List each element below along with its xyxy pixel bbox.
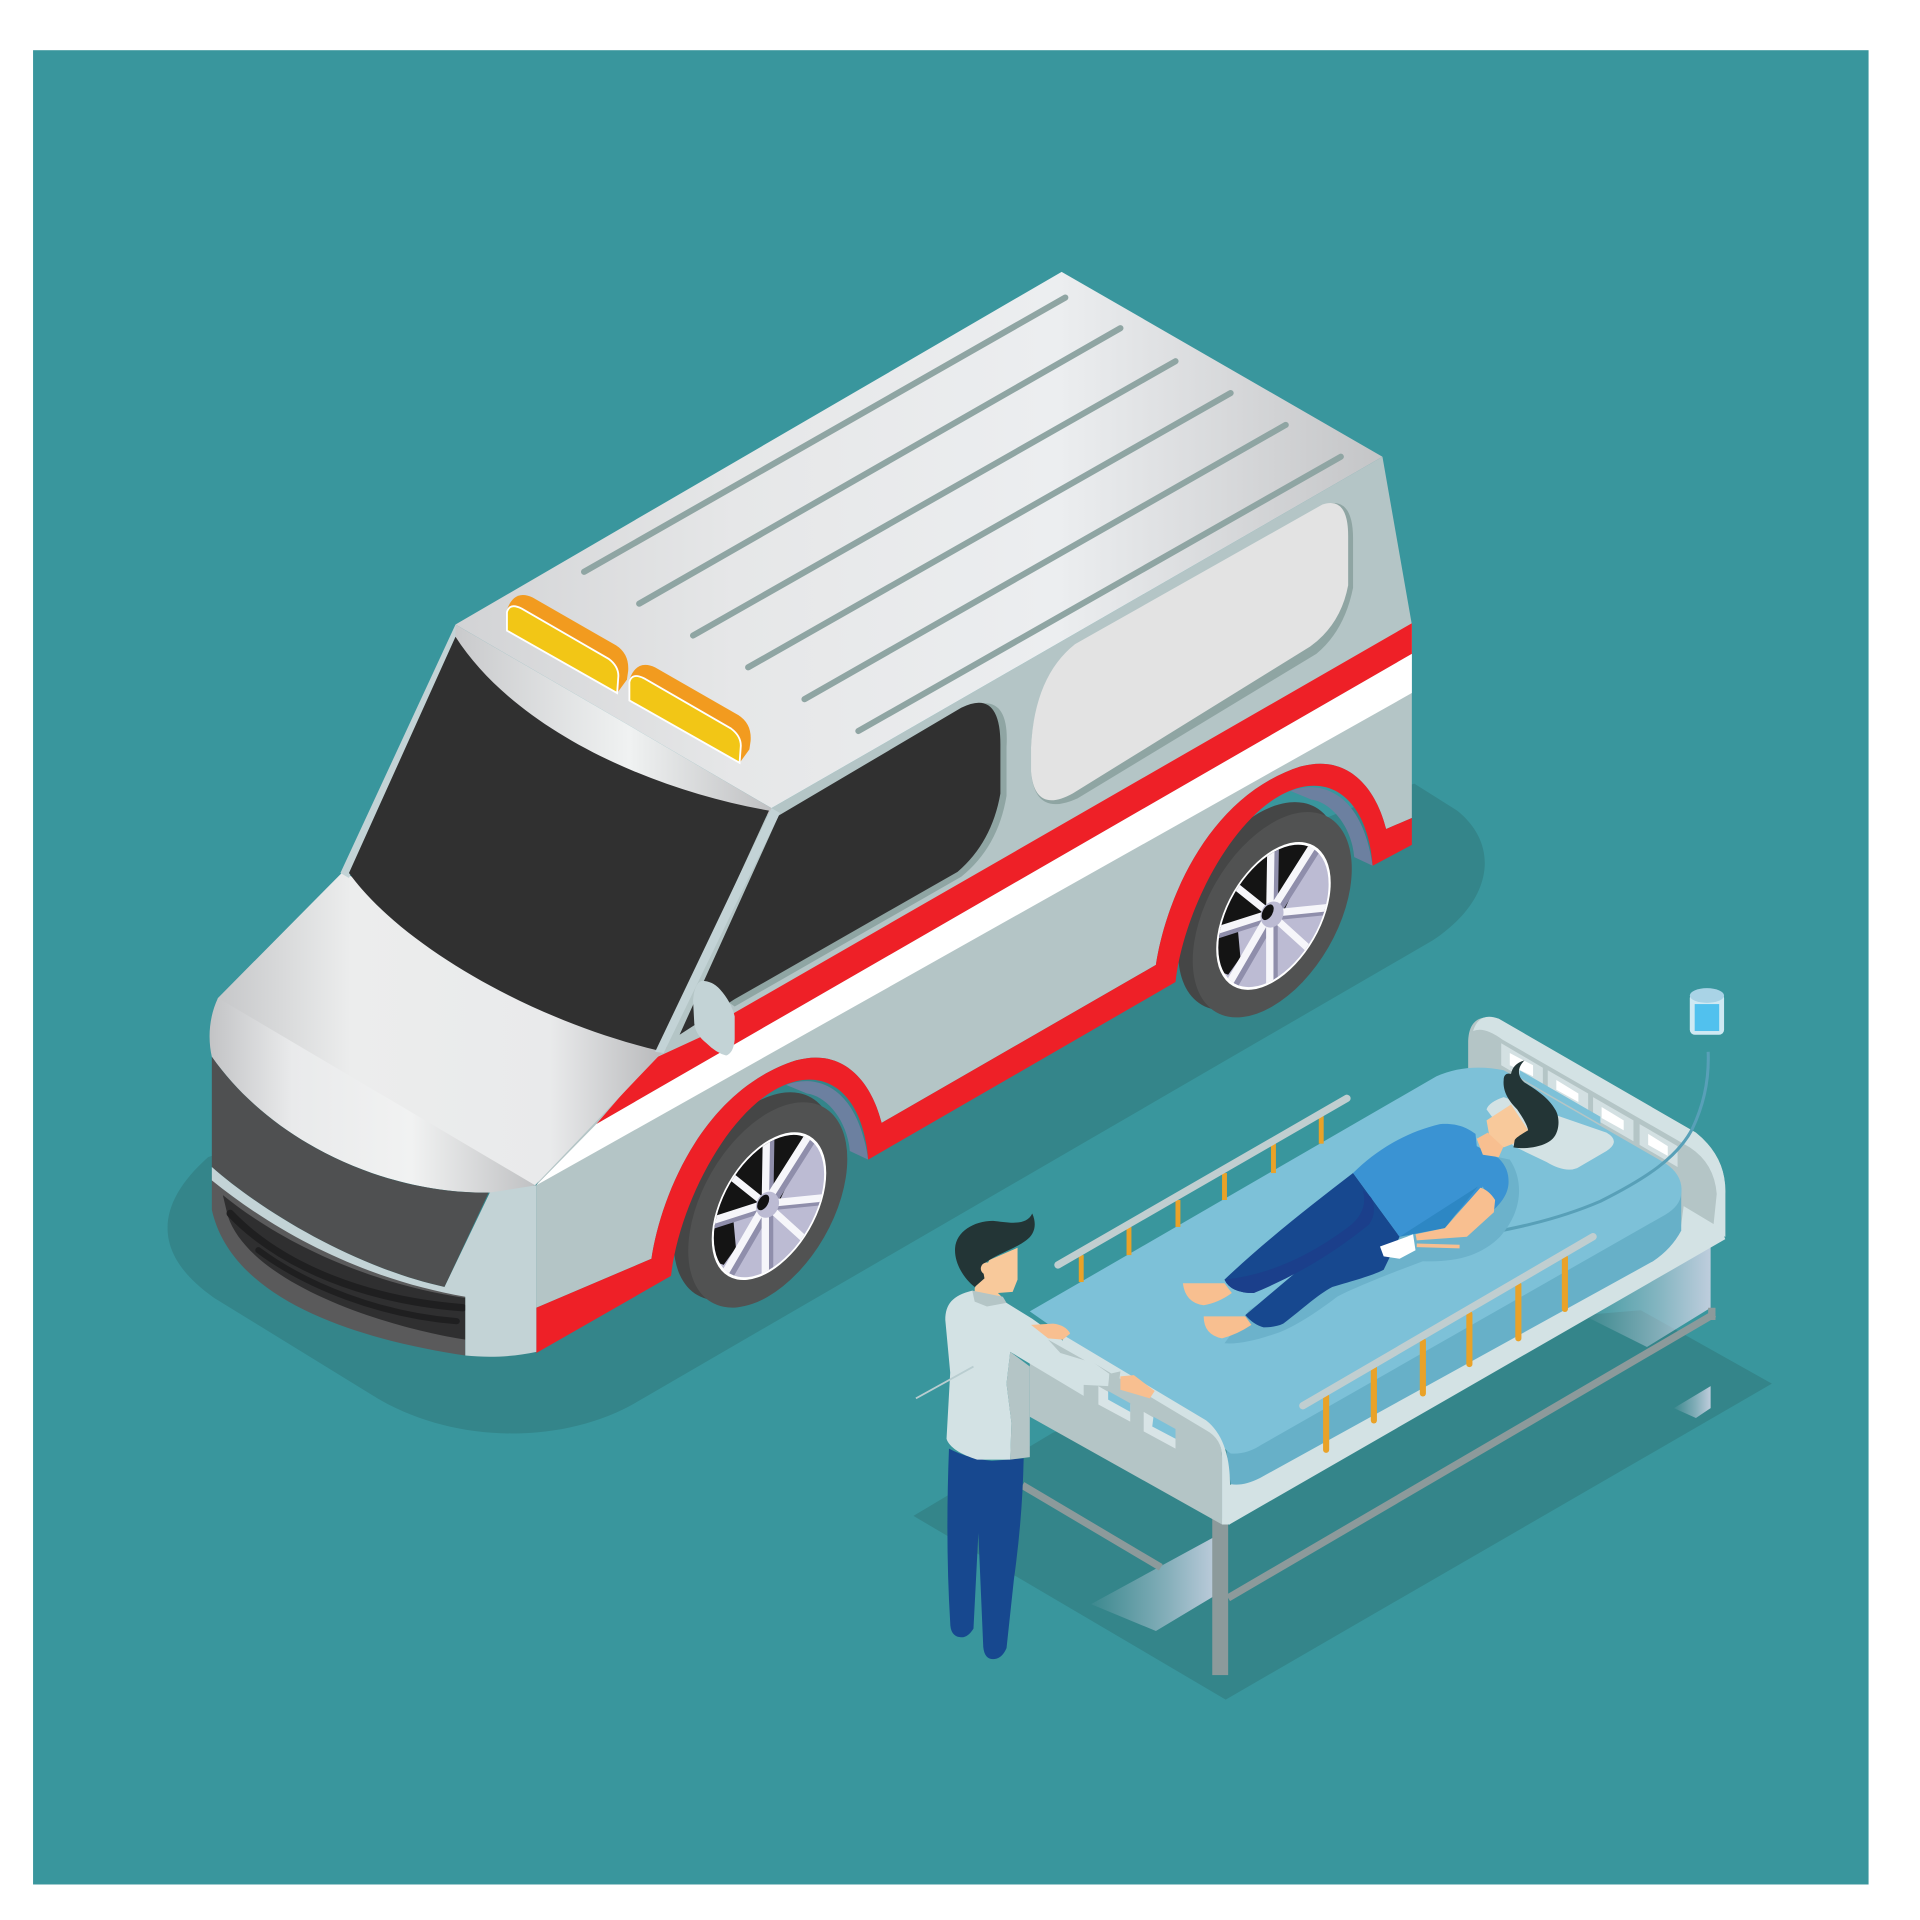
bumper highlight [212, 1167, 465, 1297]
IV bag [1690, 988, 1724, 1035]
foot board rim [1063, 1335, 1230, 1524]
IV tube [1460, 1052, 1708, 1238]
front grille [212, 1057, 489, 1287]
doctor neck and face [975, 1248, 1018, 1303]
right windshield pillar [655, 808, 780, 1053]
beacon light 2 [629, 665, 751, 763]
rear side panel [1031, 503, 1353, 804]
bed base rods [1022, 1308, 1714, 1598]
hospital bed [1022, 988, 1725, 1675]
nose [210, 998, 535, 1193]
patient trousers [1224, 1173, 1400, 1327]
patient second forearm [1417, 1245, 1460, 1247]
far side rail [1058, 1098, 1347, 1282]
doctor trousers [947, 1449, 1024, 1659]
near side rail [1303, 1237, 1593, 1450]
doctor ear [981, 1262, 993, 1275]
ambulance side body [536, 457, 1412, 1308]
bumper vents [230, 1213, 463, 1321]
patient shirt shadow [1400, 1187, 1478, 1237]
right front corner [444, 1185, 536, 1357]
patient hair [1504, 1060, 1559, 1148]
patient face [1487, 1104, 1528, 1147]
doctor coat [945, 1291, 1109, 1460]
patient left foot [1183, 1283, 1232, 1305]
doctor collar [972, 1291, 1007, 1307]
left windshield pillar [340, 624, 460, 878]
doctor left hand [1031, 1324, 1070, 1340]
patient right foot [1204, 1316, 1251, 1338]
side mirror [693, 981, 735, 1056]
roof [456, 272, 1382, 808]
front wheel [674, 1057, 851, 1343]
foot board panel [1030, 1329, 1222, 1524]
mattress top [1030, 1068, 1682, 1454]
patient shirt [1353, 1124, 1509, 1237]
patient neck [1477, 1133, 1504, 1157]
foot board [1030, 1329, 1230, 1524]
roof ribs [584, 298, 1341, 731]
foot board window 2 [1144, 1412, 1176, 1449]
patient shadow [1224, 1151, 1519, 1343]
coat crease line [916, 1367, 973, 1398]
patient bandage [1380, 1234, 1416, 1259]
front wheel arch interior [786, 1081, 868, 1160]
headboard panels [1501, 1043, 1678, 1167]
headboard rim [1473, 1017, 1725, 1237]
red side stripe [596, 623, 1412, 1124]
doctor sleeve fold [1048, 1340, 1085, 1360]
rear wheel arch interior [1291, 787, 1373, 866]
foot board window 1 [1098, 1386, 1130, 1422]
doctor sleeve shading [1007, 1352, 1030, 1460]
front bumper [212, 1176, 465, 1356]
headboard slots [1510, 1053, 1668, 1156]
doctor right hand [1120, 1375, 1155, 1398]
doctor hair [955, 1213, 1035, 1287]
white side stripe [536, 654, 1412, 1185]
bed leg [1212, 1518, 1228, 1675]
under-bed hatch shading left [1091, 1537, 1217, 1631]
bumper intake [223, 1195, 465, 1340]
doctor cuff [1109, 1371, 1120, 1390]
windshield [349, 637, 769, 1051]
hood [211, 872, 667, 1185]
bed ground shadow [913, 1310, 1772, 1700]
headboard [1468, 1017, 1725, 1237]
side window [722, 703, 1007, 1007]
beacon light 1 [507, 595, 628, 693]
pillow [1487, 1097, 1614, 1170]
under-bed hatch shading right [1586, 1243, 1711, 1347]
patient [1183, 1060, 1559, 1343]
patient trousers shadow [1224, 1190, 1374, 1293]
ambulance ground shadow [168, 784, 1485, 1433]
ambulance [210, 272, 1412, 1357]
headboard mattress strip [1520, 1070, 1600, 1124]
doctor [916, 1213, 1155, 1659]
mattress side [1226, 1188, 1681, 1485]
roof front cap [456, 624, 771, 816]
rear wheel [1178, 767, 1356, 1052]
patient arm [1416, 1188, 1495, 1240]
floor reflection [1674, 1386, 1711, 1418]
bed frame side [1229, 1206, 1725, 1524]
lower red trim and wheel arches [536, 764, 1412, 1353]
